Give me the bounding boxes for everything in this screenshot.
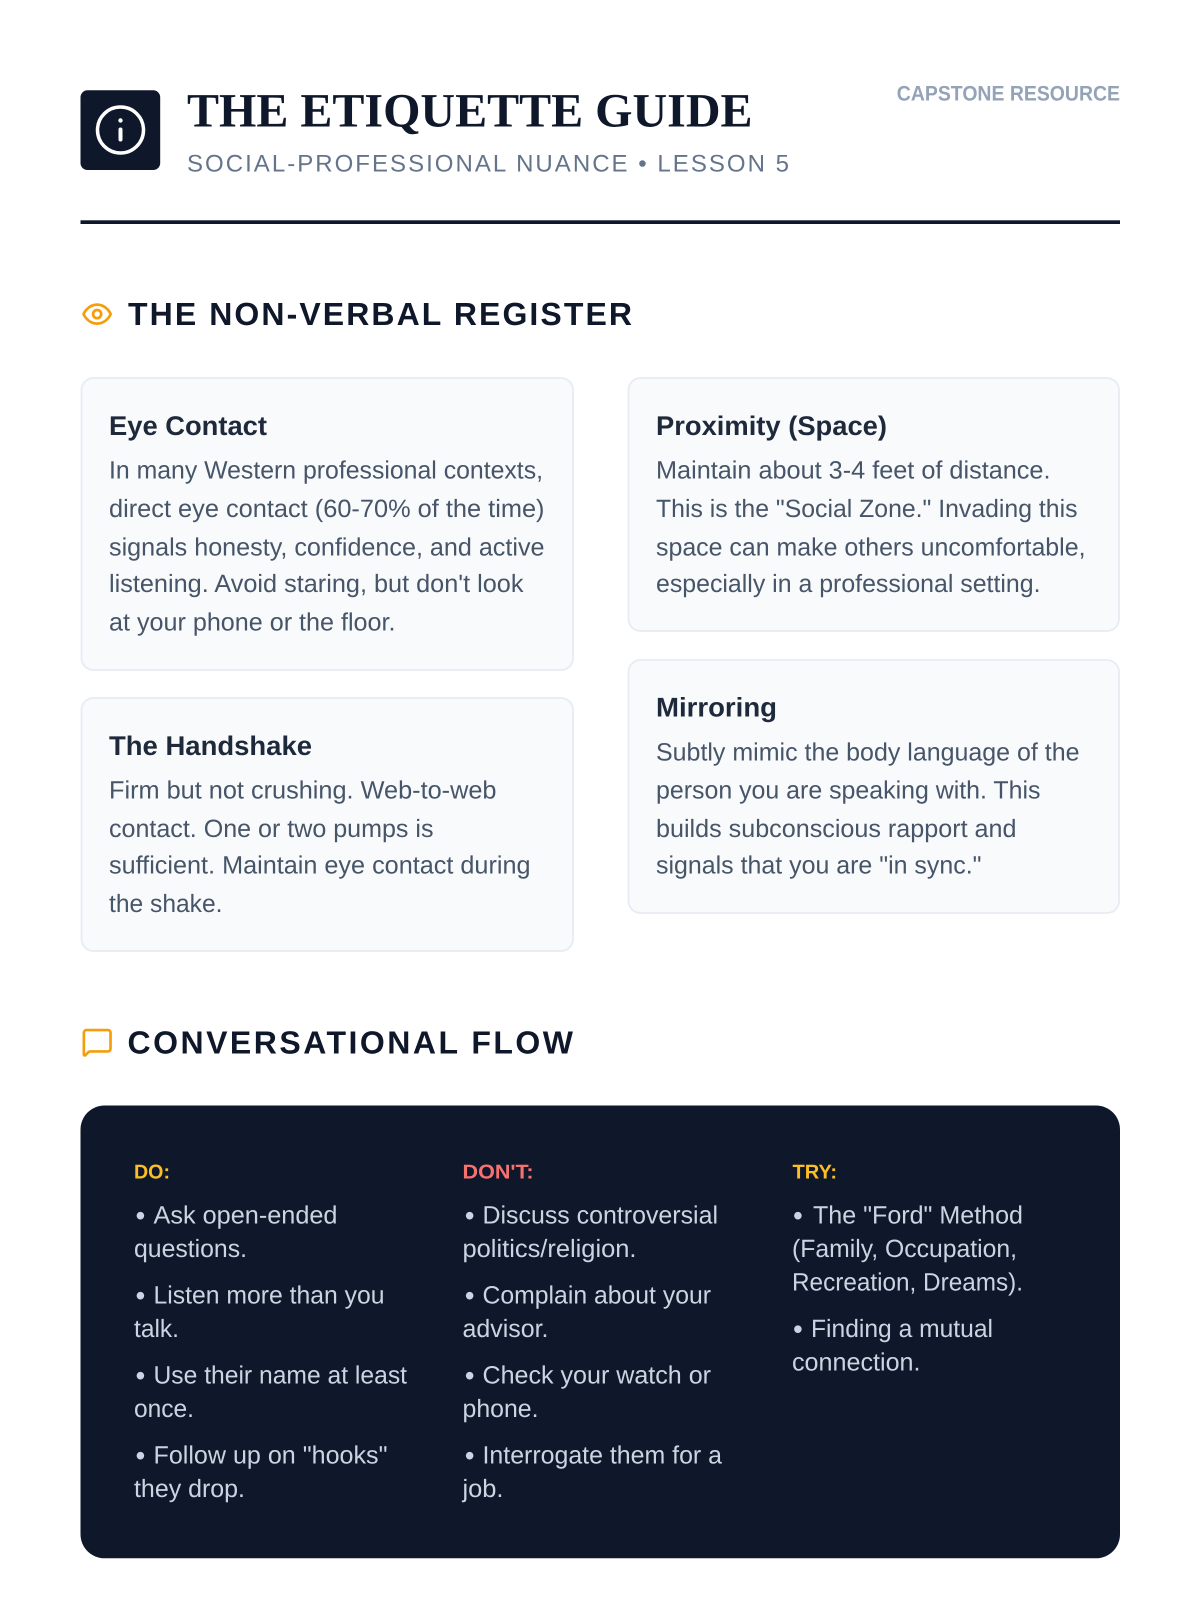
- item: discuss: [462, 1200, 718, 1263]
- card body: direct eye contact (60-70% of the time): [109, 495, 544, 523]
- title: THE ETIQUETTE GUIDE: [187, 85, 752, 138]
- section: the non-verbal register: [82, 296, 1119, 951]
- card body: at your phone or the floor.: [109, 608, 396, 636]
- card body: space can make others uncomfortable,: [656, 533, 1086, 561]
- resource tag: CAPSTONE RESOURCE: [897, 83, 1120, 106]
- item: complain: Complain about your: [482, 1282, 711, 1310]
- item: interrogate: job.: [461, 1475, 504, 1503]
- item: listen: talk.: [134, 1315, 179, 1343]
- item: listen: •: [136, 1280, 145, 1311]
- item: ask: [134, 1200, 338, 1263]
- card: mirroring: [628, 660, 1119, 913]
- card body: Maintain about 3-4 feet of distance.: [656, 457, 1050, 485]
- card body: Firm but not crushing. Web-to-web: [109, 777, 496, 805]
- item: ford method: Recreation, Dreams).: [792, 1268, 1023, 1296]
- item: discuss: Discuss controversial: [482, 1202, 718, 1230]
- card body: person you are speaking with. This: [656, 777, 1040, 805]
- card title: Eye Contact: [109, 411, 267, 441]
- card title: The Handshake: [109, 731, 312, 761]
- label: don't: DON'T:: [462, 1161, 534, 1183]
- item: interrogate: •: [465, 1440, 475, 1471]
- subtitle: SOCIAL-PROFESSIONAL NUANCE • LESSON 5: [187, 151, 789, 178]
- card body: [109, 777, 530, 918]
- item: interrogate: Interrogate them for a: [482, 1442, 722, 1470]
- item: check: phone.: [462, 1395, 538, 1423]
- column: try: [792, 1161, 1023, 1376]
- card body: the shake.: [109, 890, 222, 918]
- item: name: once.: [134, 1395, 194, 1423]
- panel: conversation tips: [80, 1106, 1120, 1558]
- item: ford method: •: [793, 1200, 803, 1231]
- item: name: [134, 1360, 407, 1423]
- item: ask: questions.: [134, 1235, 247, 1263]
- card body: builds subconscious rapport and: [656, 815, 1016, 843]
- icon: speech bubble: [84, 1030, 111, 1055]
- item: hooks: Follow up on "hooks": [154, 1442, 388, 1470]
- item: check: Check your watch or: [482, 1362, 711, 1390]
- card body: [656, 457, 1086, 598]
- item: ford method: [792, 1200, 1023, 1296]
- label: try: TRY:: [792, 1161, 837, 1183]
- heading: CONVERSATIONAL FLOW: [128, 1024, 574, 1060]
- column: do: [134, 1161, 407, 1503]
- column: don't: [461, 1161, 722, 1503]
- item: mutual connection: Finding a mutual: [811, 1315, 993, 1343]
- item: listen: Listen more than you: [154, 1282, 384, 1310]
- label: do: DO:: [134, 1161, 170, 1183]
- item: listen: [134, 1280, 384, 1343]
- item: mutual connection: [792, 1314, 993, 1376]
- card body: especially in a professional setting.: [656, 570, 1040, 598]
- section: conversational flow: [80, 1024, 1120, 1558]
- card title: Proximity (Space): [656, 411, 887, 441]
- card body: listening. Avoid staring, but don't look: [109, 570, 524, 598]
- item: ford method: (Family, Occupation,: [792, 1235, 1017, 1263]
- item: ford method: The "Ford" Method: [813, 1202, 1023, 1230]
- card body: Subtly mimic the body language of the: [656, 738, 1080, 766]
- item: mutual connection: connection.: [792, 1348, 920, 1376]
- item: mutual connection: •: [793, 1314, 803, 1344]
- card body: contact. One or two pumps is: [109, 815, 434, 843]
- item: interrogate: [461, 1440, 722, 1503]
- item: complain: advisor.: [462, 1315, 548, 1343]
- card: eye contact: [82, 378, 573, 670]
- item: hooks: [134, 1440, 388, 1503]
- item: hooks: •: [136, 1440, 145, 1471]
- card body: signals that you are "in sync.": [656, 852, 982, 880]
- card body: This is the "Social Zone." Invading this: [656, 495, 1078, 523]
- item: name: Use their name at least: [154, 1362, 407, 1390]
- item: discuss: politics/religion.: [462, 1235, 636, 1263]
- card body: sufficient. Maintain eye contact during: [109, 852, 530, 880]
- header: [80, 83, 1120, 224]
- card body: signals honesty, confidence, and active: [109, 533, 544, 561]
- item: complain: [462, 1280, 711, 1343]
- item: name: •: [136, 1360, 145, 1391]
- item: ask: •: [136, 1200, 145, 1231]
- item: complain: •: [465, 1280, 475, 1311]
- item: hooks: they drop.: [134, 1475, 245, 1503]
- card: proximity: [628, 378, 1119, 631]
- item: check: [462, 1360, 711, 1423]
- item: check: •: [465, 1360, 475, 1391]
- card body: In many Western professional contexts,: [109, 457, 543, 485]
- item: discuss: •: [465, 1200, 475, 1231]
- icon: eye: [84, 305, 111, 324]
- card body: [656, 738, 1080, 880]
- card: the handshake: [82, 698, 573, 951]
- card body: [109, 457, 544, 636]
- heading: THE NON-VERBAL REGISTER: [128, 296, 632, 332]
- icon: info: [80, 90, 160, 170]
- item: ask: Ask open-ended: [154, 1202, 338, 1230]
- card title: Mirroring: [656, 693, 777, 723]
